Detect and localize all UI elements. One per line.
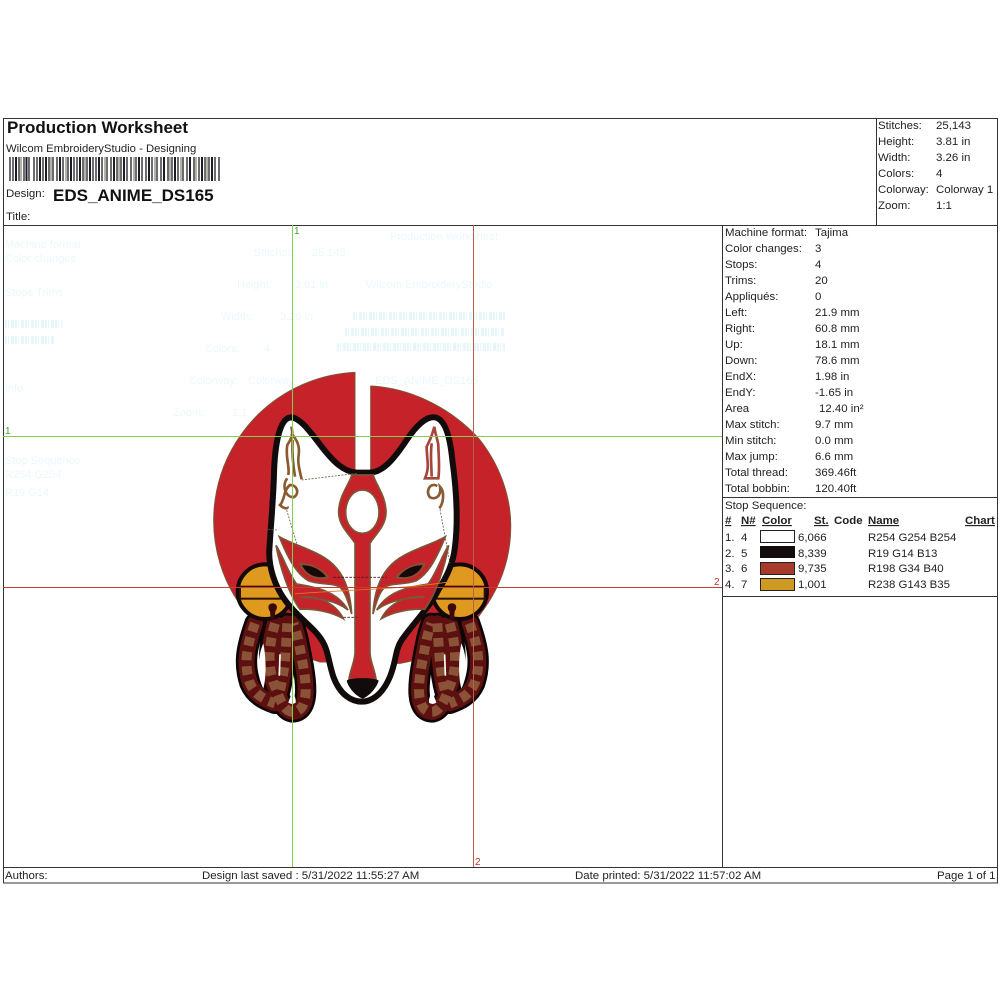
machine details: 3 [815,243,821,255]
ghosted background text: Stops Trims [5,287,64,299]
summary stats: 3.26 in [936,152,970,164]
row 3: 6 [741,563,747,575]
ghosted background text: Machine format [5,239,81,251]
right bell [431,564,487,619]
row 3 [725,562,944,575]
ghosted background text: EDS_ANIME_DS165 [375,375,478,387]
machine details: Max jump: [725,451,778,463]
machine details: 0.0 mm [815,435,853,447]
ghosted background text: 4 [264,343,270,355]
ghosted background text: Colorway: [189,375,238,387]
row 2: 2. [725,548,735,560]
machine details: 21.9 mm [815,307,860,319]
machine details: Color changes: [725,243,802,255]
machine details: 60.8 mm [815,323,860,335]
machine details: Stops: [725,259,757,271]
left eye markings [276,537,352,619]
ghosted background text: Stitches: [254,247,296,259]
ghosted background text: Zoom: [173,407,204,419]
row 1: 6,066 [798,532,827,544]
ghosted background text: Color changes [5,253,76,265]
summary stats: 25,143 [936,120,971,132]
column headers: # [725,515,732,527]
ghosted background text: Height: [237,279,272,291]
machine details: Min stitch: [725,435,776,447]
row 1: R254 G254 B254 [868,532,957,544]
guide lines [3,225,722,867]
guide labels: 1 [294,226,300,237]
machine details: Up: [725,339,743,351]
design label: Design: [6,188,45,200]
machine details: 78.6 mm [815,355,860,367]
left bell [238,564,293,619]
column headers: Code [834,515,863,527]
footer: Design last saved : 5/31/2022 11:55:27 AM [202,870,419,882]
red sun, left half [214,372,355,662]
ghosted background text: Colorway [248,375,294,387]
machine details: 9.7 mm [815,419,853,431]
machine details: 0 [815,291,821,303]
ghosted background text: 25,143 [312,247,346,259]
stop sequence table [725,500,995,591]
left ear detail [280,427,302,508]
row 2: 8,339 [798,548,827,560]
summary stats: Zoom: [878,200,910,212]
worksheet frame [4,118,998,883]
ghosted background text: R254 G254 [5,469,61,481]
machine details: 12.40 in² [819,403,864,415]
ghosted background text: Width: [221,311,252,323]
machine details: Area [725,403,750,415]
machine details: 1.98 in [815,371,849,383]
table heading: Stop Sequence: [725,500,806,512]
column headers: Name [868,515,899,527]
fox mask embroidery artwork [214,372,511,712]
machine details: Left: [725,307,747,319]
ghosted background text: Info [5,383,23,395]
machine details: Appliqués: [725,291,778,303]
machine details: -1.65 in [815,387,853,399]
row 3: 9,735 [798,563,827,575]
header panel [6,118,219,223]
machine details: 369.46ft [815,467,857,479]
red sun, right half [371,386,511,663]
right cord [419,623,478,712]
machine details: 20 [815,275,828,287]
row 4 [725,578,950,591]
column headers: Chart [965,515,995,527]
ghosted background text: Production Worksheet [390,231,498,243]
right ear detail [425,427,443,508]
ghosted background text: 3.26 in [280,311,313,323]
machine details: EndY: [725,387,756,399]
summary stats: Stitches: [878,120,922,132]
software name: Wilcom EmbroideryStudio - Designing [6,143,196,155]
summary stats: 1:1 [936,200,952,212]
summary stats: 3.81 in [936,136,970,148]
guide labels: 2 [475,857,481,868]
guide labels [5,226,720,868]
row 4: 4. [725,579,735,591]
forehead ring and stem [339,475,386,679]
summary stats [878,120,993,212]
row 1: 1. [725,532,735,544]
machine details: Machine format: [725,227,807,239]
left cord [246,623,306,712]
column headers: St. [814,515,829,527]
machine details: Total thread: [725,467,788,479]
machine details: 120.40ft [815,483,857,495]
nose [347,678,379,699]
machine details: Down: [725,355,757,367]
summary stats: Height: [878,136,914,148]
summary stats: 4 [936,168,943,180]
machine details: 6.6 mm [815,451,853,463]
row 1: 4 [741,532,748,544]
ghosted background text: Wilcom EmbroideryStudio [366,279,493,291]
machine details: EndX: [725,371,756,383]
guide labels: 1 [5,426,11,437]
row 3: R198 G34 B40 [868,563,944,575]
footer: Page 1 of 1 [937,870,996,882]
machine details: Total bobbin: [725,483,790,495]
footer: Date printed: 5/31/2022 11:57:02 AM [575,870,761,882]
row 3: 3. [725,563,735,575]
machine details: 4 [815,259,822,271]
row 4: 1,001 [798,579,827,591]
right eye markings [373,537,449,619]
machine details: Right: [725,323,755,335]
machine details: Tajima [815,227,849,239]
summary stats: Width: [878,152,910,164]
title label: Title: [6,211,30,223]
ghosted background text: R19 G14 [5,487,49,499]
footer [5,870,996,882]
ghosted background text [5,231,505,499]
summary stats: Colorway: [878,184,929,196]
summary stats: Colorway 1 [936,184,993,196]
machine details: Trims: [725,275,756,287]
mask face [269,417,457,702]
ghosted background text: Colors: [205,343,240,355]
row 4: R238 G143 B35 [868,579,950,591]
row 2 [725,546,937,560]
ghosted background text: 3.81 in [295,279,328,291]
row 1 [725,530,957,544]
machine details: 18.1 mm [815,339,860,351]
column headers: N# [741,515,756,527]
row 2: 5 [741,548,747,560]
guide labels: 2 [714,577,720,588]
machine details [725,227,864,495]
column headers [725,515,995,527]
title: Production Worksheet [7,118,188,137]
ghosted background text: Stop Sequence [5,455,80,467]
row 4: 7 [741,579,747,591]
design name: EDS_ANIME_DS165 [53,186,214,205]
ghosted background text: 1:1 [232,407,247,419]
barcode [10,157,219,181]
machine details: Max stitch: [725,419,780,431]
summary stats: Colors: [878,168,914,180]
column headers: Color [762,515,792,527]
stitch jump paths [265,473,450,617]
footer: Authors: [5,870,48,882]
row 2: R19 G14 B13 [868,548,937,560]
